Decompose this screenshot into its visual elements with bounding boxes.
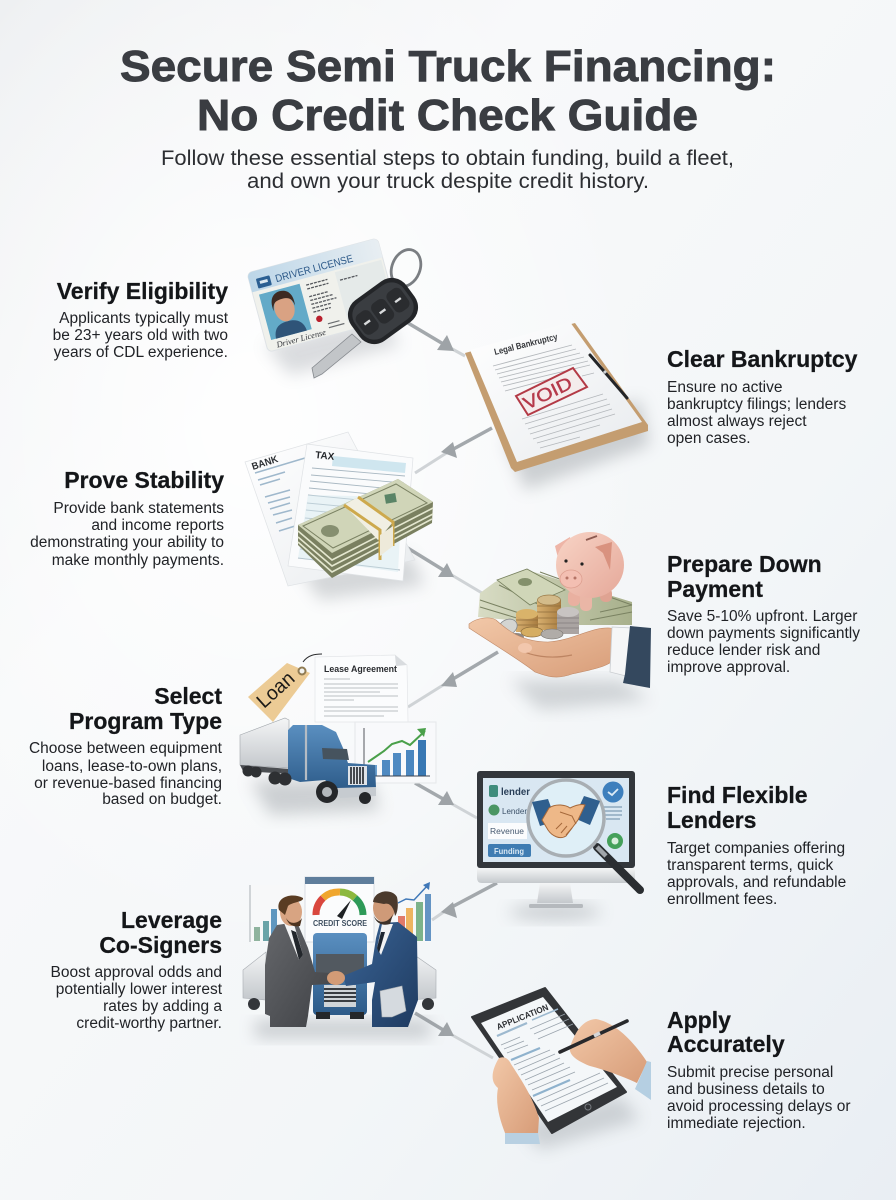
credit score panel: CREDIT SCORE bbox=[313, 919, 368, 928]
key fob bbox=[341, 271, 425, 351]
loan tag bbox=[248, 654, 322, 722]
description: and business details to bbox=[667, 1081, 825, 1098]
folder bbox=[380, 986, 406, 1017]
tax form bbox=[288, 444, 413, 581]
credit score panel bbox=[305, 877, 374, 942]
description: Choose between equipment bbox=[29, 740, 223, 757]
step: verify eligibility text bbox=[53, 278, 229, 361]
heading: Apply bbox=[667, 1007, 731, 1033]
description: rates by adding a bbox=[103, 998, 222, 1015]
description: be 23+ years old with two bbox=[53, 327, 228, 344]
clipboard bbox=[465, 323, 648, 472]
tablet screen bbox=[481, 997, 617, 1122]
tablet body bbox=[472, 988, 626, 1133]
left bar chart bbox=[250, 885, 295, 942]
pen bbox=[590, 355, 627, 398]
coins bbox=[496, 595, 579, 641]
bank statement bbox=[245, 432, 415, 586]
semi truck bbox=[240, 718, 376, 804]
step: select program type text bbox=[29, 683, 223, 808]
suit sleeve bbox=[623, 626, 651, 688]
badges bbox=[602, 782, 624, 849]
heading: Accurately bbox=[667, 1031, 785, 1057]
description: make monthly payments. bbox=[52, 552, 224, 569]
description: demonstrating your ability to bbox=[30, 534, 224, 551]
truck behind bbox=[243, 933, 436, 1019]
description: Submit precise personal bbox=[667, 1064, 833, 1081]
arrow: program type to lenders bbox=[415, 783, 477, 818]
description: approvals, and refundable bbox=[667, 874, 846, 891]
step: prove stability text bbox=[30, 467, 224, 569]
magnifier lens bbox=[528, 780, 604, 856]
handshake bbox=[327, 971, 345, 985]
driver license card: DRIVER LICENSE bbox=[274, 253, 354, 285]
description: down payments significantly bbox=[667, 625, 860, 642]
illustration: lender comparison monitor with magnifier bbox=[477, 771, 640, 920]
paper bbox=[470, 322, 642, 462]
heading: Co-Signers bbox=[99, 932, 222, 958]
handshake bbox=[532, 796, 600, 838]
tax form: TAX bbox=[315, 450, 335, 463]
heading: Lenders bbox=[667, 807, 756, 833]
right bar chart bbox=[395, 882, 431, 942]
description: open cases. bbox=[667, 430, 751, 447]
shirt cuff bbox=[610, 627, 632, 676]
key blade bbox=[312, 334, 361, 378]
illustration: voided bankruptcy document on clipboard bbox=[465, 322, 650, 490]
description: based on budget. bbox=[102, 791, 222, 808]
title: Secure Semi Truck Financing: bbox=[120, 42, 776, 91]
heading: Payment bbox=[667, 576, 763, 602]
right hand bbox=[570, 1019, 651, 1100]
open hand bbox=[469, 618, 623, 677]
step: prepare down payment text bbox=[667, 551, 860, 676]
arrow: lenders to co-signers bbox=[432, 883, 497, 920]
cash bundle bbox=[298, 479, 433, 578]
heading: Verify Eligibility bbox=[57, 278, 228, 304]
description: reduce lender risk and bbox=[667, 642, 820, 659]
description: loans, lease-to-own plans, bbox=[42, 758, 222, 775]
monitor body bbox=[477, 771, 635, 908]
arrow: stability to down payment bbox=[406, 547, 482, 593]
title: No Credit Check Guide bbox=[197, 91, 698, 140]
description: and income reports bbox=[91, 517, 224, 534]
lender list: lender bbox=[501, 787, 530, 798]
illustration: piggy bank, cash and coins on a hand bbox=[469, 532, 651, 710]
description: Boost approval odds and bbox=[51, 964, 222, 981]
step: clear bankruptcy text bbox=[667, 346, 858, 447]
illustration: lease agreement, loan tag, truck and chart bbox=[240, 654, 436, 815]
heading: Select bbox=[154, 683, 222, 709]
step: apply accurately text bbox=[667, 1007, 851, 1132]
description: Target companies offering bbox=[667, 840, 845, 857]
heading: Program Type bbox=[69, 708, 222, 734]
home button bbox=[585, 1104, 591, 1110]
heading: Prove Stability bbox=[64, 467, 224, 493]
application title: APPLICATION bbox=[495, 1002, 550, 1032]
left hand bbox=[493, 1057, 540, 1144]
gauge bbox=[316, 892, 363, 915]
VOID stamp: VOID bbox=[520, 373, 575, 414]
driver license card: Driver License bbox=[274, 327, 327, 350]
stylus pen bbox=[560, 1021, 627, 1052]
description: credit-worthy partner. bbox=[76, 1015, 222, 1032]
bank statement: BANK bbox=[251, 454, 280, 473]
arrow: co-signers to application bbox=[415, 1013, 493, 1058]
description: bankruptcy filings; lenders bbox=[667, 396, 846, 413]
description: immediate rejection. bbox=[667, 1115, 806, 1132]
lender list: Lender bbox=[502, 806, 527, 816]
description: or revenue-based financing bbox=[34, 775, 222, 792]
subtitle bbox=[161, 147, 734, 193]
document heading: Legal Bankruptcy bbox=[493, 332, 559, 357]
heading: Clear Bankruptcy bbox=[667, 346, 858, 372]
arrow: bankruptcy to stability bbox=[415, 428, 492, 473]
lender list bbox=[488, 785, 531, 857]
lender list: Funding bbox=[494, 847, 524, 856]
description: enrollment fees. bbox=[667, 891, 777, 908]
subtitle: and own your truck despite credit history. bbox=[247, 170, 649, 193]
form fields bbox=[497, 1009, 608, 1111]
driver license card bbox=[247, 238, 399, 352]
description: avoid processing delays or bbox=[667, 1098, 851, 1115]
lender list: Revenue bbox=[490, 826, 524, 836]
description: Save 5-10% upfront. Larger bbox=[667, 608, 857, 625]
illustration: driver license and keys bbox=[247, 238, 426, 378]
description: potentially lower interest bbox=[56, 981, 223, 998]
description: improve approval. bbox=[667, 659, 790, 676]
heading: Prepare Down bbox=[667, 551, 822, 577]
man in blue suit bbox=[343, 891, 418, 1027]
document lines bbox=[493, 345, 615, 448]
magnifier handle bbox=[597, 847, 640, 890]
heading: Leverage bbox=[121, 907, 222, 933]
description: almost always reject bbox=[667, 413, 807, 430]
title bbox=[120, 42, 776, 140]
lease agreement: Lease Agreement bbox=[324, 664, 398, 675]
description: Provide bank statements bbox=[53, 500, 224, 517]
arrow: eligibility to bankruptcy bbox=[408, 323, 465, 356]
subtitle: Follow these essential steps to obtain funding, build a fleet, bbox=[161, 147, 734, 170]
loan tag: Loan bbox=[253, 668, 299, 713]
growth chart bbox=[355, 722, 436, 783]
description: years of CDL experience. bbox=[54, 344, 228, 361]
piggy bank bbox=[555, 532, 624, 611]
key ring bbox=[386, 245, 426, 291]
lease agreement bbox=[315, 655, 408, 722]
illustration: bank and tax documents with cash bbox=[245, 432, 433, 600]
step: find flexible lenders text bbox=[667, 782, 846, 908]
heading: Find Flexible bbox=[667, 782, 808, 808]
VOID stamp bbox=[516, 368, 587, 415]
arrow: down payment to program type bbox=[408, 652, 498, 707]
illustration: tablet application being signed bbox=[472, 988, 651, 1150]
description: Ensure no active bbox=[667, 379, 782, 396]
illustration: co-signers shaking hands with credit score bbox=[243, 877, 436, 1038]
man in grey suit bbox=[265, 895, 331, 1027]
description: transparent terms, quick bbox=[667, 857, 834, 874]
cash stack bbox=[478, 569, 632, 625]
step: leverage co-signers text bbox=[51, 907, 223, 1032]
description: Applicants typically must bbox=[59, 310, 229, 327]
